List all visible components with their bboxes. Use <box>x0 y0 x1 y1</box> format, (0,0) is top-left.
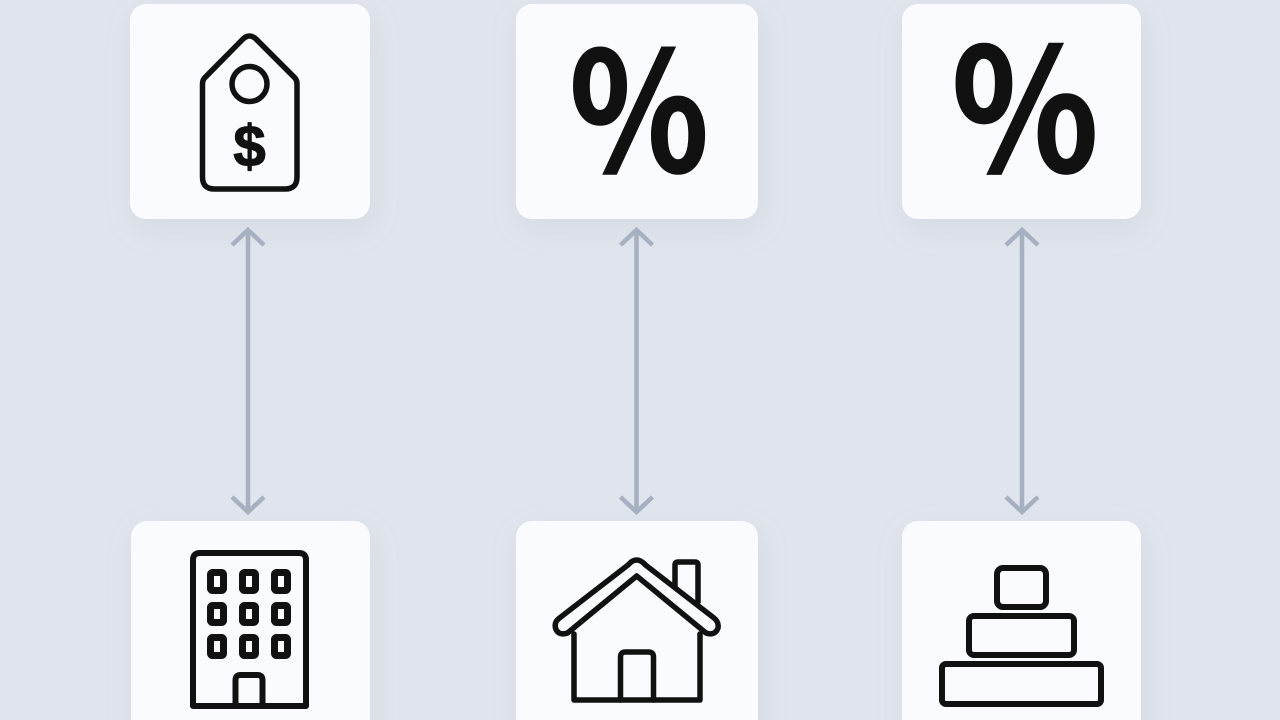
card: house <box>516 521 758 720</box>
card: building <box>131 521 370 720</box>
card: price tag <box>130 4 370 219</box>
card: percent one <box>516 0 758 221</box>
arrow: percent to stack <box>1006 230 1038 512</box>
icon: stacked tiers <box>942 568 1101 704</box>
icon: building <box>193 553 306 706</box>
icon: house <box>555 560 718 700</box>
card: percent two <box>902 0 1141 222</box>
icon: price tag <box>202 36 297 189</box>
card: stacked tiers <box>902 521 1141 720</box>
arrow: tag to building <box>232 230 264 512</box>
arrow: percent to house <box>620 230 652 512</box>
dollar sign: $ <box>233 114 266 179</box>
